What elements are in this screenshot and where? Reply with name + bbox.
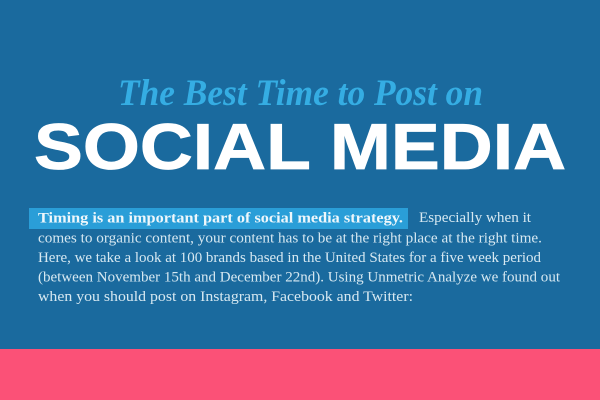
highlighted lead sentence: Timing is an important part of social media strategy.: [38, 210, 403, 226]
paragraph line 1: Especially when it: [419, 210, 531, 226]
paragraph line 5: when you should post on Instagram, Facebook and Twitter:: [38, 289, 413, 305]
intro text block: [29, 208, 560, 305]
subtitle: The Best Time to Post on: The Best Time to Post on: [118, 73, 483, 114]
highlighted lead sentence: [29, 208, 408, 229]
paragraph line 4: (between November 15th and December 22nd). Using Unmetric Analyze we found out: [38, 270, 560, 286]
title: SOCIAL MEDIA: SOCIAL MEDIA: [34, 110, 566, 183]
paragraph line 2: comes to organic content, your content has to be at the right place at the right time.: [38, 230, 542, 246]
pink footer band: [0, 349, 600, 400]
paragraph line 3: Here, we take a look at 100 brands based in the United States for a five week period: [38, 250, 542, 266]
